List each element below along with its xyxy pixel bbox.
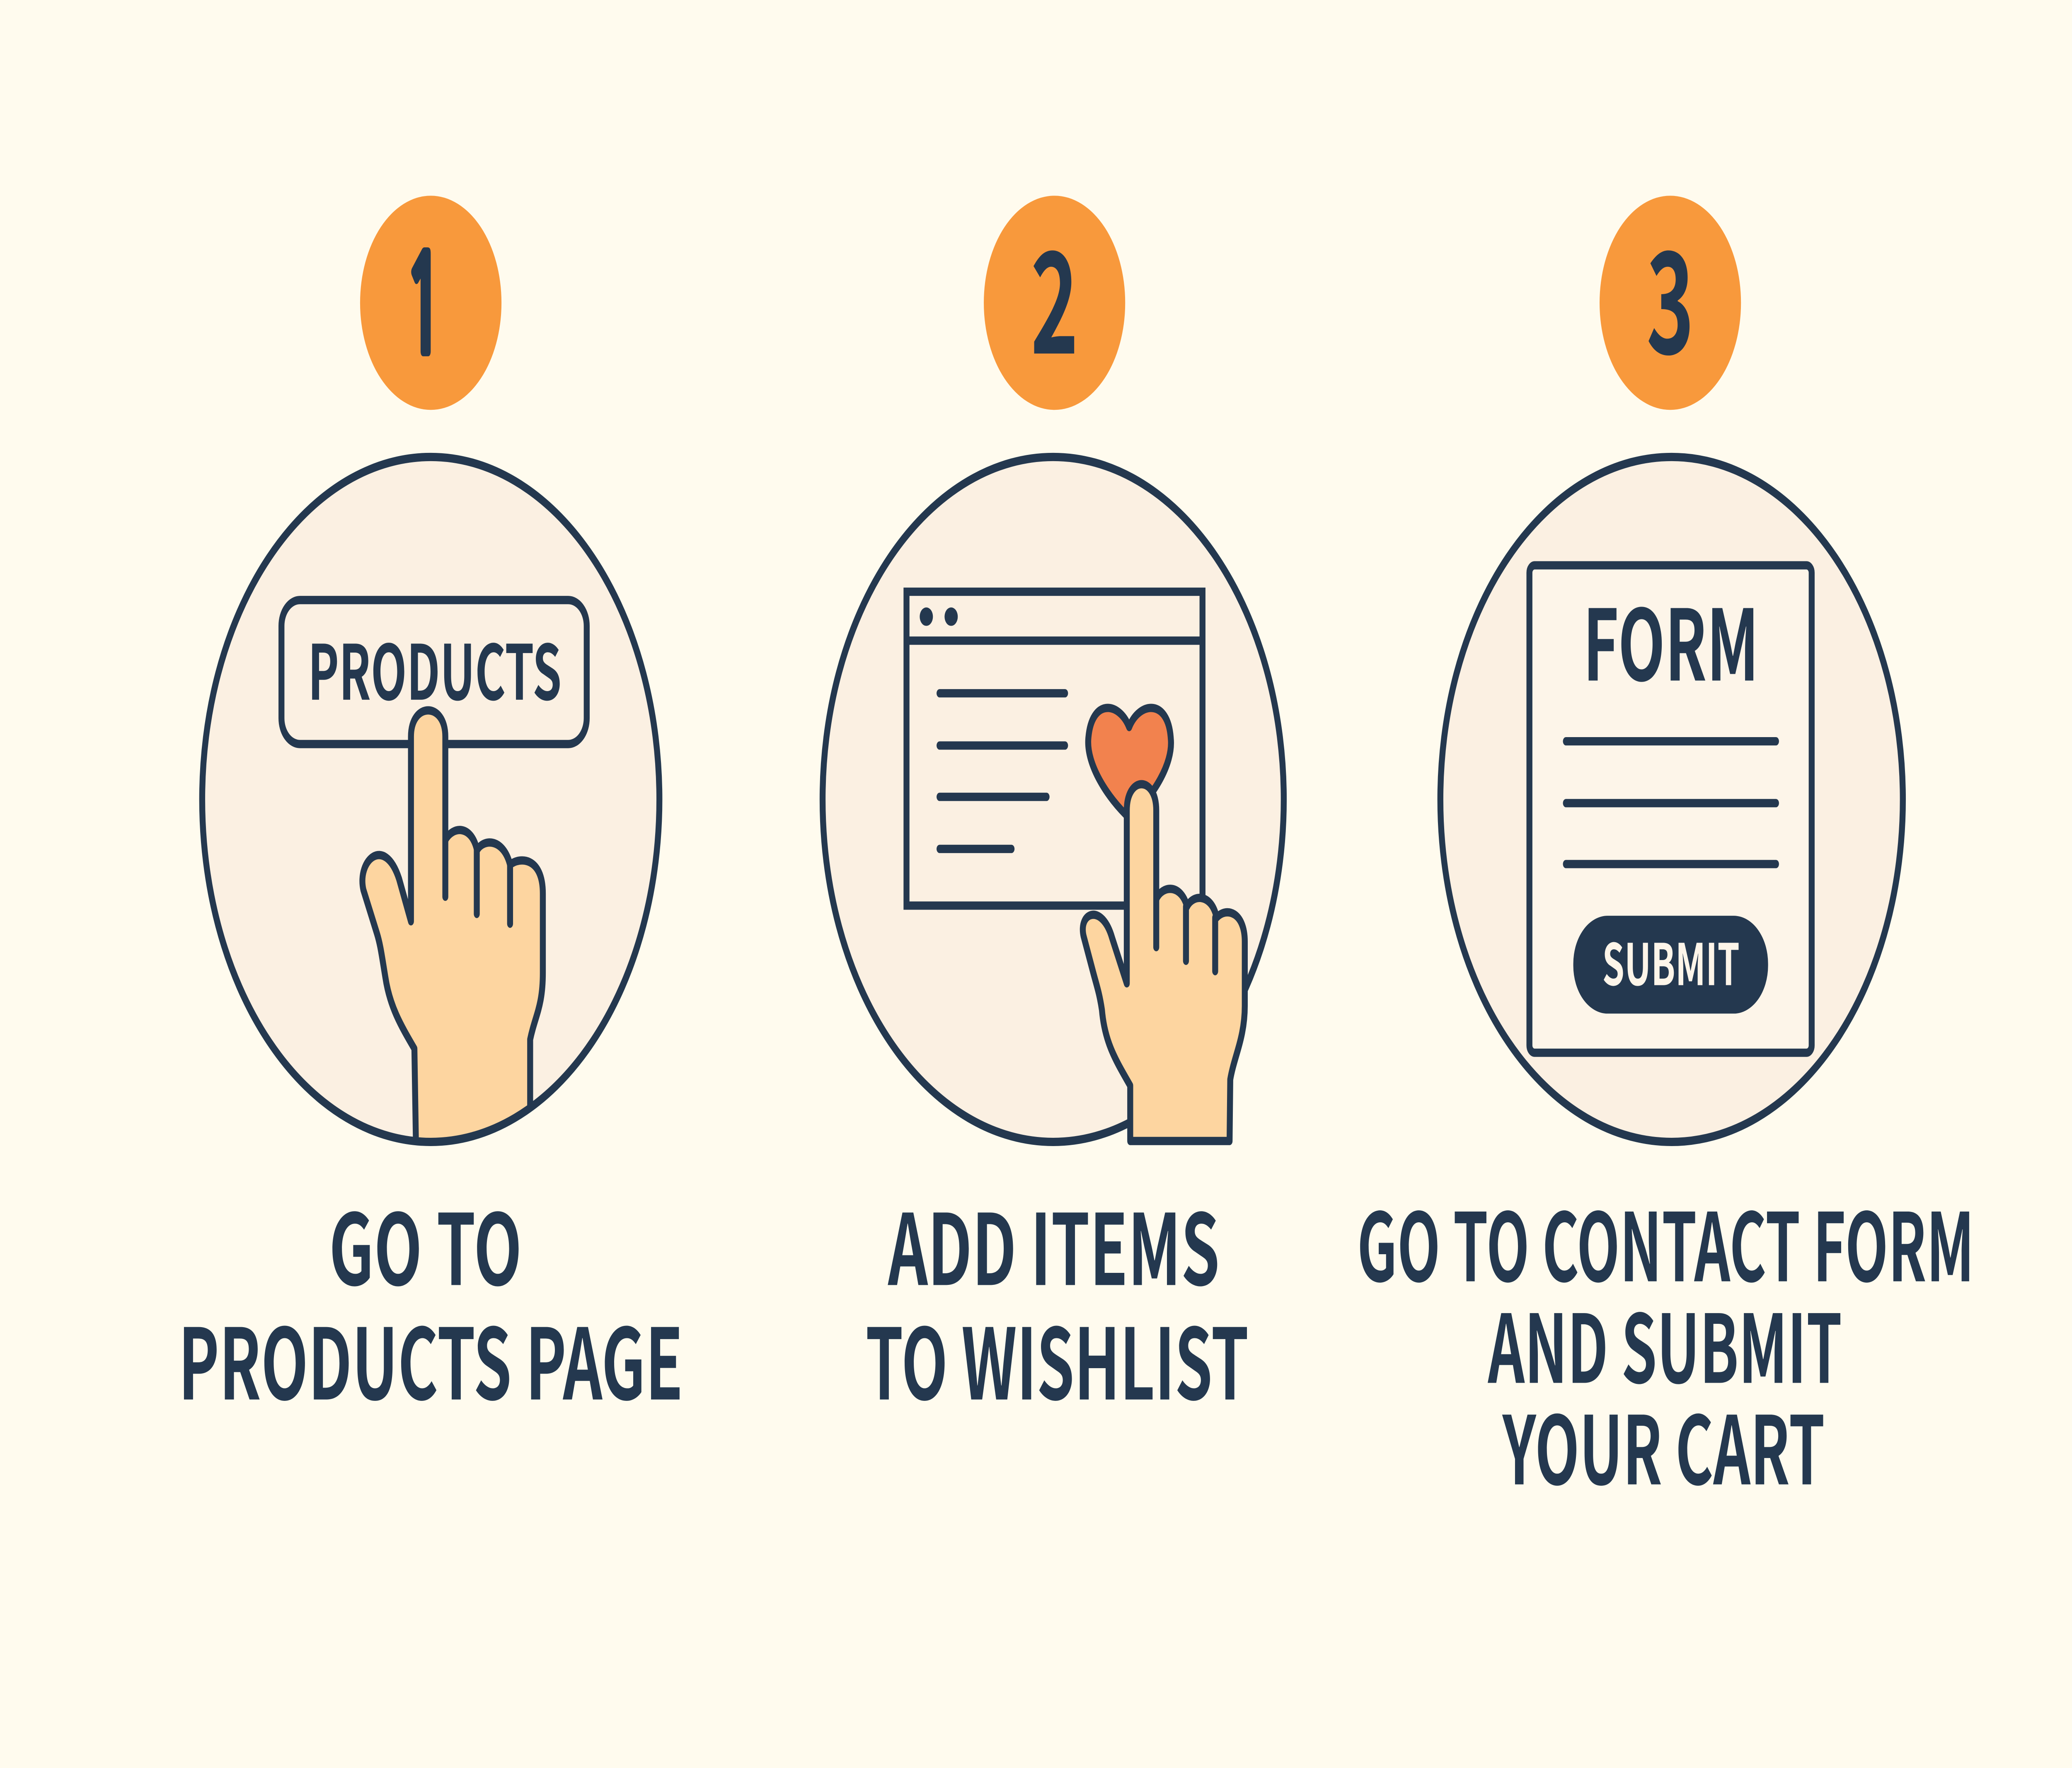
panel: step 2 add items to wishlist	[823, 191, 1284, 1428]
infographic canvas	[184, 196, 1969, 1486]
step 2 label: TO WISHLIST	[866, 1287, 1249, 1428]
step 2 label: ADD ITEMS	[888, 1172, 1220, 1313]
step 1 label: PRODUCTS PAGE	[178, 1287, 683, 1428]
products button	[281, 600, 587, 744]
illustration circle 1	[202, 457, 659, 1142]
step 2 label	[866, 1172, 1249, 1428]
number badge 1: 1	[404, 240, 444, 373]
form document	[1530, 565, 1812, 1053]
icon: heart	[1088, 708, 1171, 818]
icon: pointing hand 1	[362, 710, 543, 1163]
step 3 label	[1357, 1172, 1974, 1512]
step 3 label: YOUR CART	[1502, 1375, 1825, 1512]
browser window	[907, 592, 1203, 906]
number badge 1	[360, 196, 501, 410]
products button: PRODUCTS	[308, 612, 562, 722]
panel: step 3 go to contact form and submit your cart	[1357, 191, 1974, 1512]
circle outline 1	[202, 457, 659, 1142]
illustration circle 3	[1440, 457, 1903, 1142]
step 1 label	[178, 1172, 683, 1428]
submit button	[1573, 916, 1768, 1013]
number badge 3: 3	[1646, 191, 1694, 394]
panel: step 1 go to products page	[178, 196, 683, 1428]
number badge 2: 2	[1031, 191, 1078, 394]
number badge 2	[984, 191, 1125, 410]
step 1 label: GO TO	[329, 1172, 522, 1313]
icon: pointing hand 2	[1083, 784, 1245, 1141]
number badge 3	[1600, 191, 1741, 410]
illustration circle 2	[823, 457, 1284, 1142]
form document: FORM	[1583, 568, 1759, 709]
submit button: SUBMIT	[1602, 919, 1740, 1002]
step 3 label: AND SUBMIT	[1488, 1274, 1842, 1410]
